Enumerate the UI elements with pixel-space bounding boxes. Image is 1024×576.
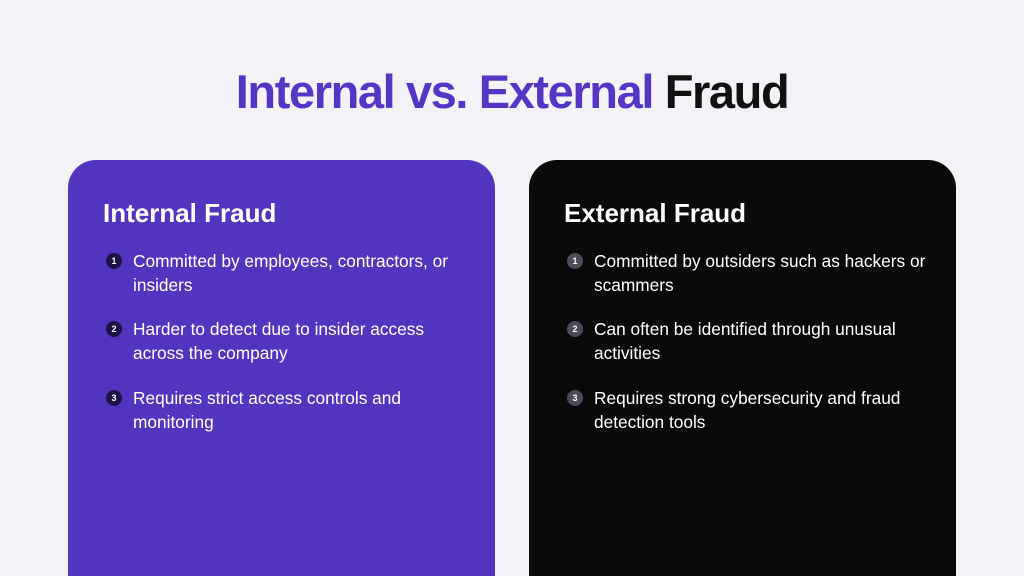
item 1: 1 bbox=[111, 256, 116, 266]
item 2: 2 bbox=[572, 324, 578, 334]
item 3: 3 bbox=[111, 393, 116, 403]
title: Internal vs. External Fraud bbox=[236, 65, 788, 118]
heading: external fraud: External Fraud bbox=[564, 198, 746, 228]
item 3: 3 bbox=[572, 393, 578, 403]
item 2: Harder to detect due to insider access across the company bbox=[133, 319, 424, 363]
panel: internal fraud bbox=[68, 160, 495, 576]
item 2: 2 bbox=[111, 324, 116, 334]
item 1: 1 bbox=[572, 256, 578, 266]
item 2: Can often be identified through unusual activities bbox=[594, 319, 896, 363]
heading: internal fraud: Internal Fraud bbox=[103, 198, 276, 228]
item 3: Requires strict access controls and monitoring bbox=[133, 388, 401, 432]
item 1: Committed by employees, contractors, or insiders bbox=[133, 251, 448, 295]
item 1: Committed by outsiders such as hackers or scammers bbox=[594, 251, 925, 295]
panel: external fraud bbox=[529, 160, 956, 576]
item 3: Requires strong cybersecurity and fraud detection tools bbox=[594, 388, 900, 432]
